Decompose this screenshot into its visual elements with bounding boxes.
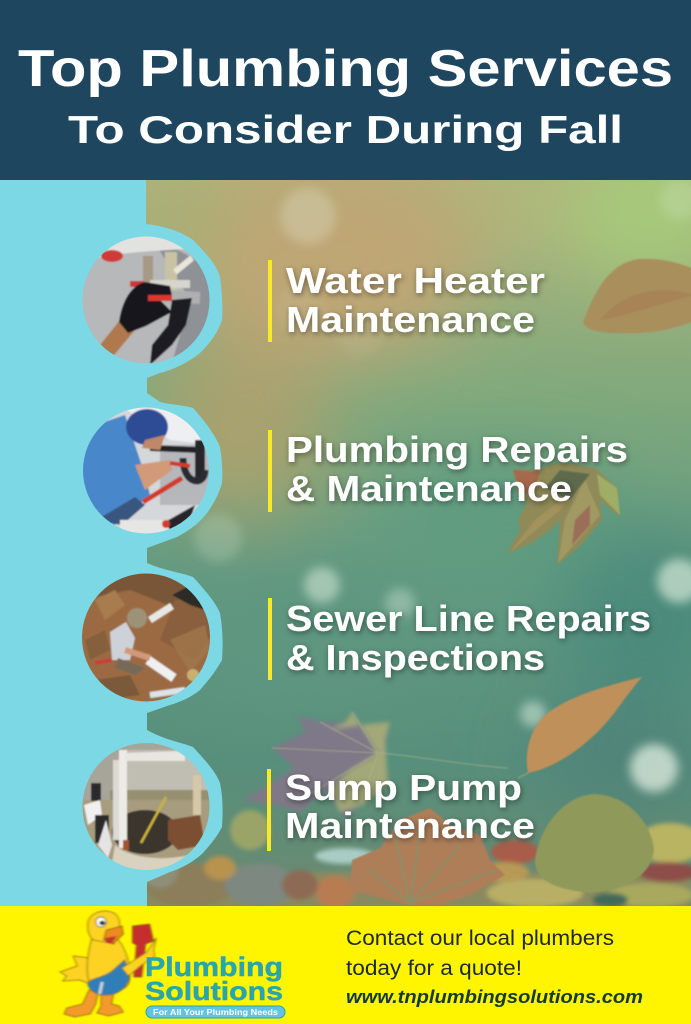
item 1: water heater maintenance: Water Heater bbox=[286, 260, 545, 301]
left wing bbox=[60, 956, 90, 984]
icon: duck mascot bbox=[60, 911, 156, 1017]
photo: sewer line repairs bbox=[82, 574, 210, 702]
item 1: water heater maintenance bbox=[268, 260, 545, 342]
item 4: sump pump maintenance bbox=[267, 767, 535, 851]
item 3: sewer line repairs and inspections: & Inspections bbox=[286, 637, 545, 678]
bokeh light spots bbox=[194, 180, 691, 792]
leaf: top right bbox=[566, 259, 691, 333]
item 2: plumbing repairs and maintenance bbox=[268, 429, 628, 512]
logo wordmark: Plumbing bbox=[145, 952, 283, 982]
item 4: sump pump maintenance: Sump Pump bbox=[285, 767, 522, 808]
item 2: plumbing repairs and maintenance: & Maintenance bbox=[286, 468, 572, 509]
leaf: large maple behind fourth heading bbox=[243, 712, 390, 820]
body bbox=[87, 935, 130, 992]
footer band bbox=[0, 906, 691, 1024]
leaf: big orange leaf at the bottom bbox=[350, 808, 505, 905]
contact text: www.tnplumbingsolutions.com bbox=[346, 987, 643, 1007]
leaf veins and stem bbox=[272, 712, 508, 800]
background: autumn leaves photo bbox=[146, 180, 691, 906]
right foot bbox=[97, 992, 123, 1016]
photo: plumbing repairs bbox=[83, 408, 209, 534]
item 4: sump pump maintenance: Maintenance bbox=[285, 805, 535, 846]
panel: wavy teal column bbox=[0, 180, 223, 906]
item 1: water heater maintenance: Maintenance bbox=[286, 299, 535, 340]
logo wordmark: Solutions bbox=[145, 976, 283, 1006]
leaf: round olive bbox=[535, 794, 654, 893]
contact text: Contact our local plumbers bbox=[346, 927, 614, 950]
item 3: sewer line repairs and inspections: Sewer Line Repairs bbox=[286, 598, 651, 639]
logo wordmark: For All Your Plumbing Needs bbox=[153, 1007, 278, 1017]
leaf: maple under second heading bbox=[507, 462, 620, 565]
subtitle: To Consider During Fall bbox=[68, 109, 623, 152]
item 3: sewer line repairs and inspections bbox=[268, 598, 651, 680]
logo wordmark bbox=[145, 952, 285, 1018]
item 2: plumbing repairs and maintenance: Plumbing Repairs bbox=[286, 429, 628, 470]
beak bbox=[104, 926, 123, 944]
title: Top Plumbing Services bbox=[18, 40, 673, 98]
head bbox=[88, 911, 120, 944]
eye bbox=[96, 917, 106, 927]
overalls bbox=[88, 960, 130, 995]
contact text bbox=[346, 927, 643, 1007]
leaf pile at the bottom bbox=[142, 810, 691, 908]
wrench bbox=[132, 924, 154, 977]
left foot bbox=[64, 990, 98, 1017]
leaf: orange bbox=[518, 677, 642, 778]
contact text: today for a quote! bbox=[346, 957, 522, 980]
photo: water heater maintenance bbox=[82, 236, 210, 364]
right wing bbox=[122, 938, 156, 976]
header band bbox=[0, 0, 691, 180]
photo: sump pump bbox=[82, 743, 210, 870]
